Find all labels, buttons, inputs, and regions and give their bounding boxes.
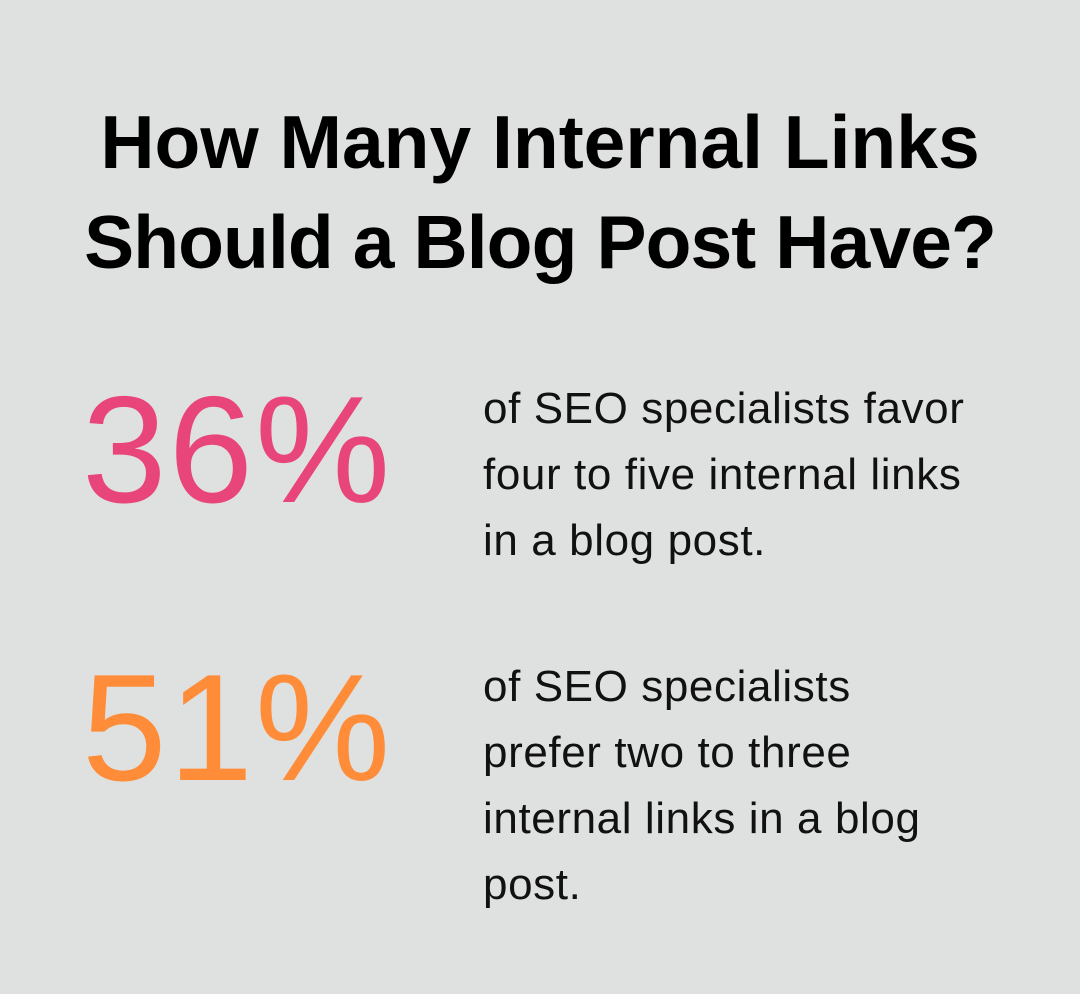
text: 51% description bbox=[483, 662, 921, 909]
text: 51% description: post. bbox=[483, 860, 581, 909]
title: Should a Blog Post Have? bbox=[84, 200, 996, 284]
text: 36% description: of SEO specialists favor bbox=[483, 384, 964, 433]
title: How Many Internal Links bbox=[100, 100, 980, 184]
text: 51% description: of SEO specialists bbox=[483, 662, 851, 711]
stat: 36%: 36% bbox=[82, 365, 392, 535]
text: 36% description bbox=[483, 384, 964, 565]
text: 36% description: four to five internal links bbox=[483, 450, 961, 499]
stat: 51%: 51% bbox=[82, 643, 392, 813]
text: 36% description: in a blog post. bbox=[483, 516, 766, 565]
text: 51% description: prefer two to three bbox=[483, 728, 851, 777]
title bbox=[84, 100, 996, 284]
text: 51% description: internal links in a blog bbox=[483, 794, 921, 843]
